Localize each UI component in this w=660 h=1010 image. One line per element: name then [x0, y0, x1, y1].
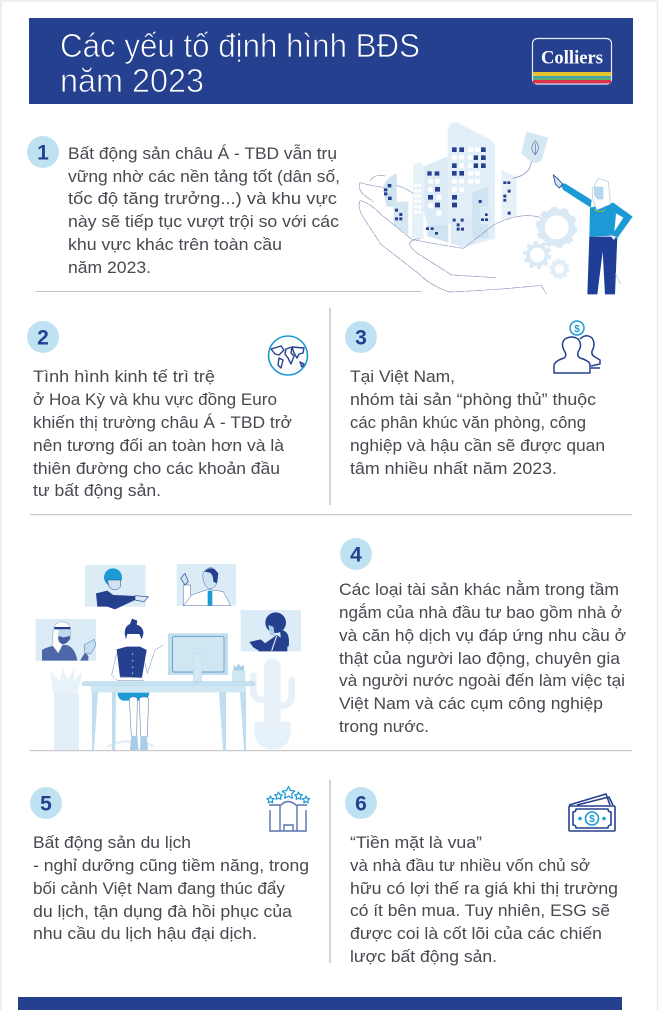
title: Các yếu tố định hình BĐS: [60, 27, 420, 64]
video panel: woman pointing: [85, 565, 148, 609]
desk: [82, 682, 255, 750]
icon: banknotes: $: [589, 814, 595, 825]
hand outline: [359, 175, 547, 294]
text block 6: hữu có lợi thế ra giá khi thị trường: [350, 879, 618, 898]
video panel: man with tie: [177, 564, 236, 606]
title: [60, 27, 420, 99]
text block 5: nhu cầu du lịch hậu đại dịch.: [33, 924, 257, 943]
text block 3: Tại Việt Nam,: [350, 367, 455, 386]
text block 2: thiên đường cho các khoản đầu: [33, 459, 280, 478]
badge 5: [30, 787, 62, 819]
text block 1: vững nhờ các nền tảng tốt (dân số,: [68, 167, 340, 186]
seated woman: [112, 619, 163, 750]
badge 4: 4: [350, 544, 362, 566]
text block 6: [350, 833, 618, 966]
text block 6: có ít bên mua. Tuy nhiên, ESG sẽ: [350, 901, 610, 920]
text block 5: Bất động sản du lịch: [33, 833, 191, 852]
text block 1: này sẽ tiếp tục vượt trội so với các: [68, 212, 339, 231]
text block 3: các phân khúc văn phòng, công: [350, 413, 586, 432]
text block 1: [68, 144, 340, 277]
text block 2: nên tương đối an toàn hơn và là: [33, 436, 285, 455]
text block 1: tốc độ tăng trưởng...) và khu vực: [68, 189, 337, 208]
cactus: [253, 658, 292, 749]
video panel: woman with ponytail: [241, 610, 301, 651]
text block 2: Tình hình kinh tế trì trệ: [33, 367, 215, 386]
header banner: [29, 18, 633, 104]
text block 5: bối cảnh Việt Nam đang thúc đẩy: [33, 879, 286, 898]
gears: [525, 208, 576, 278]
text block 3: tâm nhiều nhất năm 2023.: [350, 459, 557, 478]
left plant: [50, 667, 83, 750]
badge 4: [340, 538, 372, 570]
text block 1: năm 2023.: [68, 258, 151, 277]
computer monitor: [168, 633, 228, 682]
windows light: [414, 147, 480, 215]
icon: world map globe: [268, 336, 308, 375]
text block 1: khu vực khác trên toàn cầu: [68, 235, 282, 254]
badge 2: [27, 321, 59, 353]
video panel: man in keffiyeh: [36, 619, 96, 661]
text block 2: ở Hoa Kỳ và khu vực đồng Euro: [33, 390, 277, 409]
text block 4: Các loại tài sản khác nằm trong tầm: [339, 580, 619, 599]
text block 6: lược bất động sản.: [350, 947, 497, 966]
badge 6: 6: [355, 792, 367, 816]
badge 6: [345, 787, 377, 819]
icon: investors with dollar: $: [574, 324, 580, 335]
text block 6: và nhà đầu tư nhiều vốn chủ sở: [350, 856, 590, 875]
text block 3: nhóm tài sản “phòng thủ” thuộc: [350, 390, 596, 409]
badge 3: [345, 321, 377, 353]
text block 4: trong nước.: [339, 717, 429, 736]
windows dark: [384, 147, 511, 235]
text block 2: tư bất động sản.: [33, 481, 161, 500]
badge 2: 2: [37, 326, 49, 350]
text block 6: được coi là cốt lõi của các chiến: [350, 924, 602, 943]
text block 5: [33, 833, 309, 943]
text block 2: khiến thị trường châu Á - TBD trở: [33, 413, 292, 432]
leaf tag: [513, 132, 548, 178]
footer bar: [18, 997, 622, 1010]
text block 6: “Tiền mặt là vua”: [350, 833, 482, 852]
text block 3: nghiệp và hậu cần sẽ được quan: [350, 436, 605, 455]
text block 4: [339, 580, 626, 736]
badge 3: 3: [355, 326, 367, 350]
logo: Colliers: [532, 38, 612, 84]
logo: Colliers: Colliers: [541, 48, 603, 68]
text block 5: du lịch, tận dụng đà hồi phục của: [33, 902, 293, 921]
text block 3: [350, 367, 605, 478]
text block 5: - nghỉ dưỡng cũng tiềm năng, trong: [33, 856, 309, 875]
text block 2: [33, 367, 292, 500]
badge 1: 1: [37, 142, 49, 164]
text block 4: và căn hộ dịch vụ đáp ứng nhu cầu ở: [339, 626, 626, 645]
icon: investors with dollar: [554, 321, 600, 373]
illustration: video meeting at a desk: [36, 564, 301, 750]
text block 4: thật của người lao động, chuyên gia: [339, 649, 621, 668]
illustration: city on a hand with presenter: [359, 122, 633, 294]
buildings: [383, 122, 517, 247]
icon: five-star hotel: [267, 786, 310, 831]
badge 5: 5: [40, 792, 52, 816]
badge 1: [27, 136, 59, 168]
small desk plant: [232, 663, 245, 682]
presenter: [553, 175, 633, 294]
icon: banknotes: [569, 794, 615, 831]
text block 4: và người nước ngoài đến làm việc tại: [339, 671, 625, 690]
text block 4: ngắm của nhà đầu tư bao gồm nhà ở: [339, 603, 622, 622]
text block 1: Bất động sản châu Á - TBD vẫn trụ: [68, 144, 337, 163]
text block 4: Việt Nam và các cụm công nghiệp: [339, 694, 603, 713]
title: năm 2023: [60, 62, 204, 99]
